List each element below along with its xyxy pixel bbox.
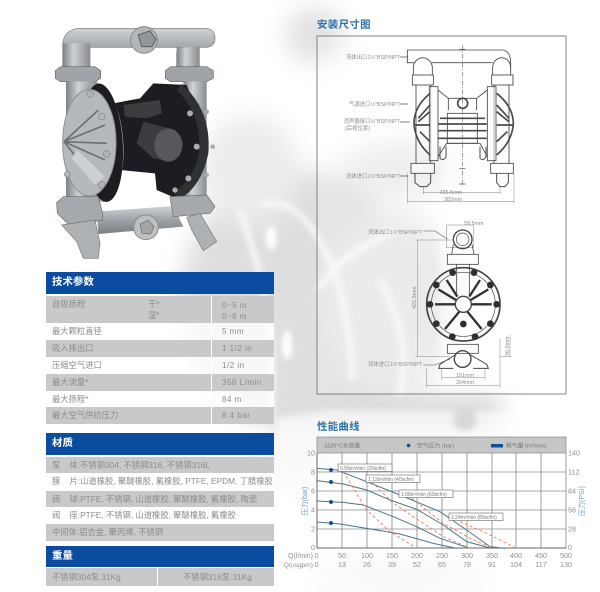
chart legend bar xyxy=(317,437,566,453)
right pressure axis xyxy=(568,448,580,552)
heading: technical parameters: 技术参数 xyxy=(52,277,94,288)
left pressure axis: 4 xyxy=(311,506,315,514)
flow axis in usgpm: 39 xyxy=(388,560,396,569)
front view labels: 消声器接口½"BSP/NPT xyxy=(344,117,401,125)
table: technical parameters xyxy=(46,296,274,424)
heading: performance curves: 性能曲线 xyxy=(317,422,360,433)
flow axis in l/min: 50 xyxy=(338,551,346,560)
row: suction and discharge port: 吸入排出口 xyxy=(52,343,94,353)
weight column separator xyxy=(157,568,158,586)
row: compressed air inlet xyxy=(46,357,274,374)
row: centre body: 中间体:铝合金, 聚丙烯, 不锈钢 xyxy=(52,527,163,537)
flow axis in usgpm xyxy=(284,560,572,569)
side view labels: 流体进口1½"BSP/NPT xyxy=(368,360,423,368)
side view drawing xyxy=(415,225,512,388)
flow axis in usgpm: 65 xyxy=(438,560,446,569)
flow axis in l/min: 0 xyxy=(314,551,318,560)
flow axis in l/min: 500 xyxy=(560,551,572,560)
front view labels: 气源进口½"BSP/NPT xyxy=(349,100,401,108)
curve labels xyxy=(338,464,503,521)
right axis title: 压力(PSI) xyxy=(577,486,586,516)
flow axis in usgpm: 52 xyxy=(413,560,421,569)
left pressure axis xyxy=(307,448,315,552)
right pressure axis: 140 xyxy=(568,448,580,458)
row: max air supply pressure: 8.4 bar xyxy=(222,411,250,420)
row: centre body xyxy=(46,524,274,541)
heading: materials xyxy=(46,433,274,455)
side view labels: 425.5mm xyxy=(412,286,418,309)
row: max head: 84 m xyxy=(222,395,242,404)
heading: technical parameters xyxy=(46,272,274,294)
side view labels: 流体出口1½"BSP/NPT xyxy=(368,228,423,236)
chart legend bar: 耗气量 (m³/min) xyxy=(506,442,547,450)
left pressure axis: 8 xyxy=(311,468,315,476)
flow axis in usgpm: Q(usgpm) xyxy=(284,562,313,569)
row: self-priming lift: 湿* xyxy=(148,310,160,320)
row: max flow xyxy=(46,374,274,391)
heading: weight: 重量 xyxy=(52,551,73,562)
row: self-priming lift xyxy=(46,296,274,323)
heading: weight xyxy=(46,546,274,567)
left axis title: 压力(bar) xyxy=(300,487,309,515)
left pressure axis: 2 xyxy=(311,524,315,534)
flow axis in usgpm: 13 xyxy=(338,560,346,569)
row: weight values: 不锈钢304泵:31Kg xyxy=(52,572,121,582)
row: valve seat: 阀 座:PTFE, 不锈钢, 山道橡胶, 聚醚橡胶, 氟橡胶 xyxy=(52,510,236,520)
row: max flow: 最大流量* xyxy=(52,377,88,387)
flow axis in l/min: 200 xyxy=(411,551,423,560)
side view labels: 36.5mm xyxy=(505,336,511,356)
front view leader lines xyxy=(400,57,410,176)
flow axis in l/min: 400 xyxy=(510,551,522,560)
right diaphragm rim xyxy=(174,84,209,200)
chart legend bar: 以20°C水测量 xyxy=(324,442,360,450)
flanges xyxy=(55,67,213,82)
heading: installation dimensions: 安装尺寸图 xyxy=(317,20,371,31)
air consumption dashed curves xyxy=(343,472,517,548)
row: max particle size xyxy=(46,323,274,340)
performance curves xyxy=(317,468,505,548)
row: max particle size: 5 mm xyxy=(222,327,244,336)
left pressure axis: 10 xyxy=(307,448,315,458)
front view labels: 382mm xyxy=(444,197,463,203)
front view labels: 285.5mm xyxy=(440,190,462,196)
curve labels: 0.56m³/min (20scfm) xyxy=(340,466,386,472)
flow axis in l/min: 150 xyxy=(386,551,398,560)
left pressure axis: 6 xyxy=(311,486,315,496)
row: weight values: 不锈钢316泵:31Kg xyxy=(183,572,252,582)
row: self-priming lift: 自吸扬程 xyxy=(52,299,85,309)
flow axis in l/min: 300 xyxy=(461,551,473,560)
row: max flow: 358 L/min xyxy=(222,378,262,387)
curve labels: 2.24m³/min (80scfm) xyxy=(451,515,497,521)
row: valve seat xyxy=(46,507,274,524)
chart grid xyxy=(317,453,566,548)
left diaphragm xyxy=(63,82,127,204)
pump columns xyxy=(66,81,207,198)
right pressure axis: 84 xyxy=(568,486,576,496)
front view labels: (后视位置) xyxy=(345,124,370,132)
table: materials xyxy=(46,457,274,541)
row: max air supply pressure: 最大空气供给压力 xyxy=(52,410,118,420)
row: pump body: 泵 体:不锈钢304, 不锈钢316, 不锈钢316L xyxy=(52,460,210,470)
right pressure axis: 56 xyxy=(568,506,576,514)
row: diaphragm xyxy=(46,473,274,491)
pump feet xyxy=(62,213,217,258)
side view labels: 59.5mm xyxy=(464,221,484,227)
side view labels: 151mm xyxy=(456,373,474,379)
flow axis in l/min: 250 xyxy=(436,551,448,560)
row: pump body xyxy=(46,457,274,473)
row: max head: 最大扬程* xyxy=(52,394,88,404)
chart legend bar: 空气压力 (bar) xyxy=(417,442,454,450)
right pressure axis: 28 xyxy=(568,524,576,534)
row: self-priming lift: 0~8 m xyxy=(222,312,247,321)
flow axis in usgpm: 104 xyxy=(510,560,522,569)
flow axis in l/min xyxy=(288,551,572,560)
flow axis in l/min: 350 xyxy=(486,551,498,560)
row: suction and discharge port xyxy=(46,340,274,357)
row: compressed air inlet: 1/2 in xyxy=(222,361,245,370)
right pressure axis: 112 xyxy=(568,468,579,476)
heading: materials: 材质 xyxy=(52,438,73,449)
front view labels: 流体进口1½"BSP/NPT xyxy=(346,172,401,180)
right pressure axis: 0 xyxy=(568,543,572,552)
front view drawing xyxy=(407,45,514,203)
flow axis in usgpm: 78 xyxy=(463,560,471,569)
flow axis in l/min: Q(l/min) xyxy=(288,553,313,560)
row: suction and discharge port: 1 1/2 in xyxy=(222,344,252,353)
curve labels: 1.12m³/min (40scfm) xyxy=(368,477,414,483)
flow axis in usgpm: 0 xyxy=(314,560,318,569)
row: self-priming lift: 0~5 m xyxy=(222,301,247,310)
lower flanges and pipe xyxy=(57,195,215,234)
flow axis in l/min: 450 xyxy=(535,551,547,560)
row: max air supply pressure xyxy=(46,407,274,424)
flow axis in usgpm: 91 xyxy=(488,560,496,569)
row: valve ball: 阀 球:PTFE, 不锈钢, 山道橡胶, 聚醚橡胶, 氟橡胶, 陶瓷 xyxy=(52,494,257,504)
flow axis in usgpm: 130 xyxy=(560,560,572,569)
air pressure dots xyxy=(329,468,333,525)
top centre plug xyxy=(131,27,157,53)
row: max particle size: 最大颗粒直径 xyxy=(52,326,102,336)
flow axis in l/min: 100 xyxy=(361,551,373,560)
side view labels: 264mm xyxy=(456,380,474,386)
row: max head xyxy=(46,391,274,407)
flow axis in usgpm: 26 xyxy=(363,560,371,569)
row: valve ball xyxy=(46,491,274,507)
side view labels xyxy=(368,221,511,386)
row: compressed air inlet: 压缩空气进口 xyxy=(52,360,102,370)
top manifold pipe xyxy=(63,28,215,72)
lower centre plug xyxy=(134,215,158,240)
row: weight values xyxy=(46,568,274,586)
curve labels: 1.68m³/min (60scfm) xyxy=(401,492,447,498)
left pressure axis: 0 xyxy=(311,543,315,552)
row: diaphragm: 膜 片:山道橡胶, 聚醚橡胶, 氟橡胶, PTFE, EPDM, 丁腈橡胶 xyxy=(52,476,273,486)
front view labels xyxy=(344,53,463,203)
front view labels: 流体出口1½"BSP/NPT xyxy=(346,53,401,61)
centre body (dark) xyxy=(110,83,207,200)
row: self-priming lift: 干* xyxy=(148,299,160,309)
column separator xyxy=(211,296,212,424)
flow axis in usgpm: 117 xyxy=(535,560,547,569)
